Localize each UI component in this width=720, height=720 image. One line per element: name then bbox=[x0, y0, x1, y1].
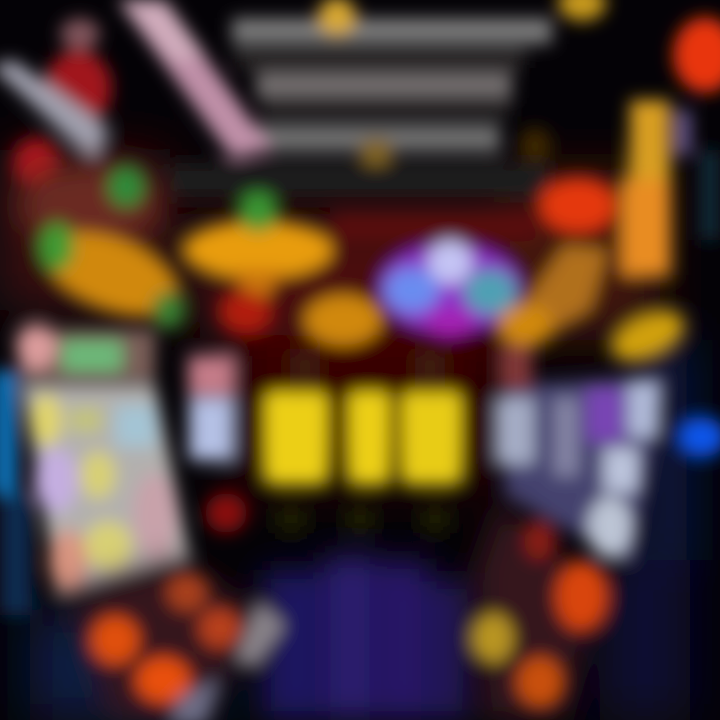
sign: green and orange slot topper, left bbox=[18, 163, 190, 333]
ambient colour glows bbox=[0, 150, 690, 720]
carpet aisle bbox=[262, 555, 470, 720]
gold ceiling lights bbox=[318, 0, 606, 166]
blue glow, right edge bbox=[678, 150, 720, 457]
sign: orange cross emblem bbox=[184, 192, 332, 333]
deep red band under headline bbox=[330, 212, 540, 240]
sign: small gold oval bbox=[305, 295, 381, 345]
sign: purple and blue diamond emblem bbox=[380, 240, 520, 336]
panel: narrow red and white machine bbox=[188, 356, 247, 533]
sign: right tower lights bbox=[498, 100, 691, 370]
panel: three yellow central slot screens bbox=[265, 392, 461, 484]
red glow, top right bbox=[673, 17, 720, 93]
panel: right slot machine screens bbox=[496, 345, 665, 565]
diagonal pink and white banner bbox=[118, 0, 272, 158]
panel: left machine button deck bbox=[70, 560, 285, 720]
panel: left slot machine screen bbox=[16, 325, 190, 595]
blue edge light, left bbox=[0, 370, 32, 615]
upper-left red and white sign bbox=[0, 18, 112, 186]
headline: three blurred text lines bbox=[170, 18, 552, 197]
panel: right machine button deck bbox=[471, 500, 608, 720]
central machine bases bbox=[275, 350, 450, 533]
